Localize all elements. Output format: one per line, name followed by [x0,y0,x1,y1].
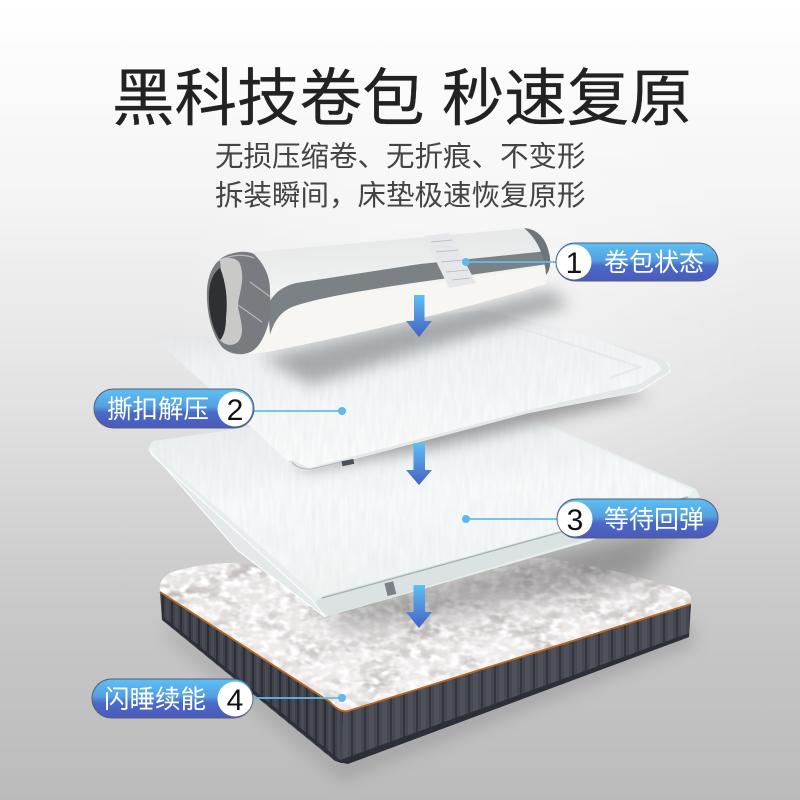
mattress orange piping [160,592,691,711]
inner seam line [483,316,640,378]
callout 4: quick sleep [92,679,346,718]
crumpled plastic interior [220,258,242,345]
mattress left side panel [160,592,343,763]
instruction sheet [424,233,476,288]
callout 4: quick sleep: 4 [227,684,243,717]
mattress: final expanded mattress [160,558,695,780]
top surface [152,421,693,596]
right roll end [524,228,550,275]
shadow cast by the roll [262,290,570,385]
small grey tag [384,581,396,596]
subtitle text [215,141,586,212]
callout 2: tear and decompress: 2 [227,394,243,427]
callout 3: wait for rebound: 3 [567,504,583,537]
arrow 1 [406,295,432,337]
mattress quilted top [160,558,691,712]
small dark tag [342,459,354,466]
dark inner roll [209,268,227,340]
subtitle text: 拆装瞬间，床垫极速恢复原形 [215,180,586,212]
roll body [226,228,550,354]
mattress: waiting to rebound [149,420,700,630]
callout 3: wait for rebound [462,499,718,538]
callout 4: quick sleep: 闪睡续能 [104,686,206,714]
callout 3: wait for rebound: 等待回弹 [604,506,704,534]
plastic rim [288,340,670,471]
grey band [268,251,548,335]
callout 1: rolled state [462,243,718,281]
crumpled plastic left edge [149,449,325,617]
callout 1: rolled state: 卷包状态 [604,249,704,277]
subtitle text: 无损压缩卷、无折痕、不变形 [215,141,586,173]
mattress right side panel [340,604,691,763]
arrow 2 [406,443,432,485]
rolled mattress [207,228,550,354]
title: 黑科技卷包 秒速复原 [112,64,692,134]
mattress: unzipped and decompressing [151,290,671,471]
arrow 3 [406,585,432,628]
callout 2: tear and decompress [94,389,346,428]
white lower roll [262,266,547,353]
front side edge [314,496,695,616]
left roll end: grey wrap [207,252,270,354]
callout 2: tear and decompress: 撕扣解压 [107,396,209,424]
plastic wrapped edge [149,420,700,617]
callout 1: rolled state: 1 [566,247,582,280]
